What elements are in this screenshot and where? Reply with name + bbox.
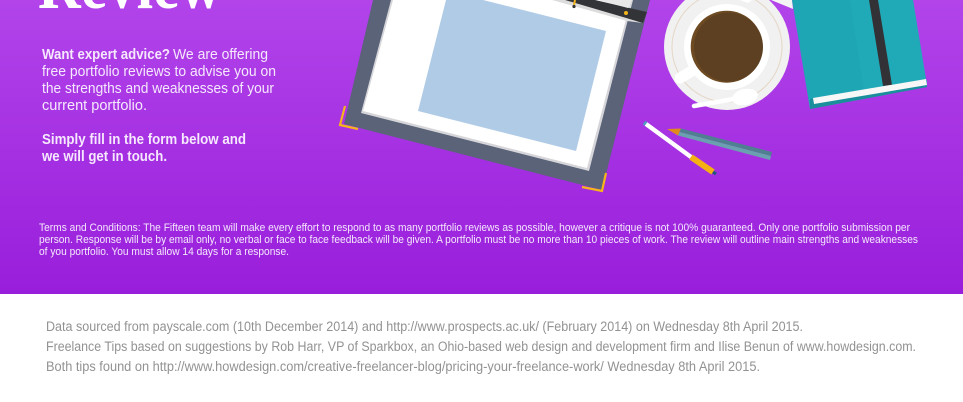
icon: corner bracket right: [582, 173, 606, 191]
text block: terms and conditions: [39, 222, 918, 258]
panel: purple background: [0, 0, 963, 294]
icon: white and yellow pen: [644, 122, 716, 174]
text block: terms and conditions: Terms and Conditions: The Fifteen team will make every effort to respond to as many portfolio reviews as possible, however a critique is not 100% guaranteed. Only one portfolio submission per: [39, 222, 910, 234]
icon: pencil: [667, 128, 772, 160]
text block: data sources: [46, 319, 916, 374]
icon: white paper under notebook: [771, 0, 793, 9]
icon: portfolio folder: [340, 0, 650, 191]
icon: teal notebook: [792, 0, 927, 109]
text block: terms and conditions: person. Response will be by email only, no verbal or face to face feedback will be given. A portfolio must be no more than 10 pieces of work. The review will outline main strengths and weaknesses: [39, 234, 918, 246]
text block: terms and conditions: of you portfolio. You must allow 14 days for a response.: [39, 246, 289, 258]
text block: offer description: we will get in touch.: [41, 149, 167, 165]
text block: offer description: current portfolio.: [42, 98, 147, 114]
text block: offer description: Simply fill in the form below and: [42, 132, 246, 148]
panel: white footer: [0, 294, 963, 402]
text block: offer description: [41, 47, 276, 165]
text block: offer description: free portfolio reviews to advise you on: [42, 64, 276, 80]
text block: data sources: Both tips found on http://www.howdesign.com/creative-freelancer-blog/pricing-your-freelance-work/ Wednesday 8th April 2015.: [46, 359, 760, 374]
icon: coffee cup on saucer: [664, 0, 790, 110]
text block: data sources: Data sourced from payscale.com (10th December 2014) and http://www.prospects.ac.uk/ (February 2014) on Wednesday 8th April 2015.: [46, 319, 803, 334]
text block: offer description: We are offering: [173, 47, 268, 63]
icon: corner bracket left: [340, 106, 358, 129]
text block: offer description: Want expert advice?: [42, 47, 170, 63]
text block: offer description: the strengths and weaknesses of your: [42, 81, 274, 97]
